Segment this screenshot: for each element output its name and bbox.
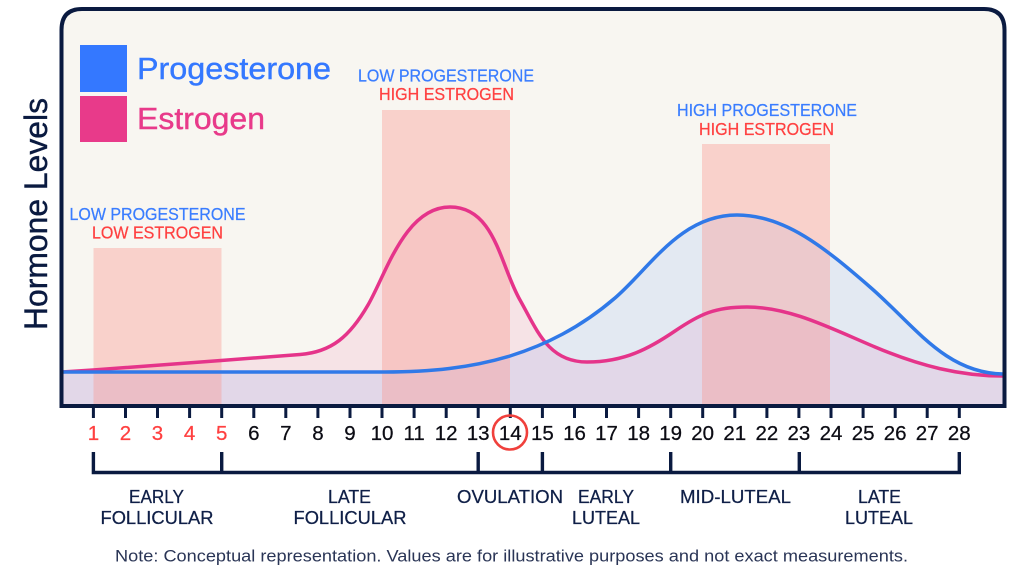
chart: progesterone area fill [62,215,1003,405]
axis labels: remaining days: 7 [280,422,292,445]
panel: chart frame [62,9,1004,406]
axis labels: early follicular days in red [88,422,227,445]
callout: high progesterone, high estrogen: HIGH ESTROGEN [699,119,834,139]
axis labels: remaining days: 13 [467,422,490,445]
axis labels: early follicular days in red: 5 [216,422,227,445]
axis labels: remaining days: 24 [820,422,842,445]
callout: low progesterone, high estrogen: HIGH ESTROGEN [379,84,514,104]
callout: low progesterone, low estrogen: LOW ESTROGEN [92,222,223,242]
axis labels: remaining days: 26 [884,422,907,445]
axis labels: early follicular days in red: 4 [184,422,195,445]
axis labels: remaining days: 22 [755,422,778,445]
axis labels: remaining days: 18 [627,422,650,445]
phase brackets [93,452,959,472]
axis labels: remaining days: 9 [344,422,356,445]
axis ticks [93,406,959,418]
phase label: late luteal: LATE [858,487,901,507]
axis labels: remaining days [248,422,971,445]
phase label: early luteal: EARLY [578,487,634,507]
axis labels: remaining days: 19 [659,422,682,445]
phase label: ovulation: OVULATION [457,487,563,507]
phase label: late follicular: LATE [328,487,371,507]
axis labels: remaining days: 21 [723,422,746,445]
phase label: late luteal: LUTEAL [845,508,913,528]
chart: estrogen area fill [62,207,1003,405]
callout: low progesterone, high estrogen [358,66,534,104]
panel: chart background [62,9,1004,406]
callout: low progesterone, high estrogen: LOW PROGESTERONE [358,66,534,86]
phase label: late follicular: FOLLICULAR [294,508,406,528]
axis labels: early follicular days in red: 1 [88,422,99,445]
callout: low progesterone, low estrogen [70,204,246,242]
axis title: Hormone Levels: Hormone Levels [18,98,54,330]
axis labels: remaining days: 20 [691,422,714,445]
axis labels: early follicular days in red: 3 [152,422,163,445]
callout: high progesterone, high estrogen [677,100,857,139]
axis labels: remaining days: 16 [563,422,586,445]
phase label: early luteal: LUTEAL [572,508,640,528]
axis labels: remaining days: 23 [787,422,810,445]
axis labels: remaining days: 15 [531,422,554,445]
axis labels: remaining days: 6 [248,422,260,445]
phase label: late follicular [294,487,406,528]
legend: estrogen swatch [80,96,127,142]
axis labels: early follicular days in red: 2 [120,422,131,445]
phase label: early luteal [572,487,640,528]
chart: progesterone curve [62,215,1003,374]
legend: progesterone swatch [80,45,127,92]
legend [80,45,331,142]
phase label: late luteal [845,487,913,528]
axis labels: remaining days: 27 [916,422,939,445]
phase label: early follicular: FOLLICULAR [100,508,214,528]
callout: high progesterone, high estrogen: HIGH PROGESTERONE [677,100,857,120]
footnote: Note: Conceptual representation. Values are for illustrative purposes and not exact measurements. [115,548,908,566]
axis labels: remaining days: 28 [948,422,971,445]
legend: estrogen label: Estrogen [137,101,265,136]
axis labels: remaining days: 10 [371,422,393,445]
axis labels: remaining days: 8 [312,422,324,445]
chart: estrogen curve [62,207,1003,376]
ovulation day marker [493,416,527,450]
callout: low progesterone, low estrogen: LOW PROGESTERONE [70,204,246,224]
axis labels: remaining days: 25 [852,422,875,445]
phase label: early follicular [100,487,214,528]
phase highlight bands [94,110,830,405]
axis labels: remaining days: 11 [403,422,425,445]
phase label: early follicular: EARLY [129,487,184,507]
phase label: mid-luteal: MID-LUTEAL [680,487,791,507]
legend: progesterone label: Progesterone [137,51,331,86]
axis labels: remaining days: 14 [499,422,522,445]
axis labels: remaining days: 12 [435,422,458,445]
axis labels: remaining days: 17 [595,422,618,445]
